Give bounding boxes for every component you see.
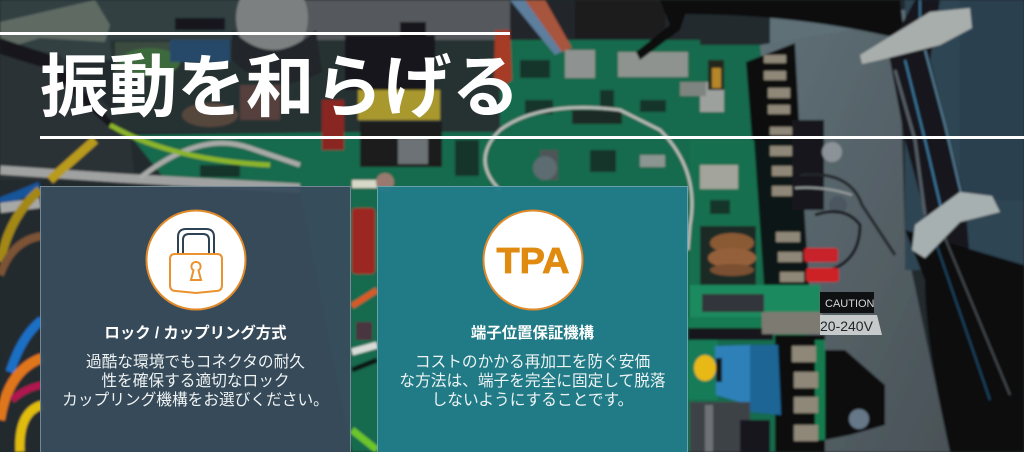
panel: TPA [377, 186, 688, 452]
PCB detail [200, 60, 730, 214]
relay strip [690, 285, 820, 317]
icon: TPA badge [482, 210, 584, 310]
panel body text: しないようにすることです。 [432, 392, 633, 409]
heading rule [40, 136, 1024, 139]
cable ties [860, 8, 972, 64]
top metal [0, 0, 240, 60]
CAUTION label [820, 292, 882, 335]
panel body text [399, 353, 666, 409]
dark wires at top [680, 0, 905, 40]
panel body text: 性を確保する適切なロック [101, 373, 290, 390]
terminal block rows, upper [746, 43, 800, 140]
PCB [130, 45, 820, 452]
panel body text: 過酷な環境でもコネクタの耐久 [86, 354, 305, 371]
panel body text: コストのかかる再加工を防ぐ安価 [415, 354, 650, 371]
gap wires and parts [352, 208, 375, 274]
panel body text [62, 353, 329, 409]
heat sink [690, 402, 750, 452]
blue component [715, 345, 750, 405]
CAUTION label: 20-240V [820, 318, 874, 334]
coil [700, 226, 756, 288]
right metal [770, 10, 910, 70]
panel heading: 端子位置保証機構 [471, 325, 594, 342]
capacitor and large parts [175, 18, 225, 30]
lower terminal blocks [775, 335, 825, 452]
panel body text: カップリング機構をお選びください。 [62, 392, 329, 409]
panel: lock / coupling [40, 186, 351, 452]
left wires [0, 170, 300, 188]
CAUTION label: CAUTION [825, 298, 875, 310]
title: 振動を和らげる [40, 49, 520, 126]
red terminals [804, 248, 838, 262]
yellow capacitor [694, 355, 716, 381]
icon: padlock [146, 210, 246, 310]
cables [888, 0, 970, 260]
panel heading: ロック / カップリング方式 [104, 325, 287, 342]
panel body text: な方法は、端子を完全に固定して脱落 [399, 373, 666, 390]
icon: TPA badge: TPA [496, 240, 570, 281]
top white rule [0, 32, 510, 35]
